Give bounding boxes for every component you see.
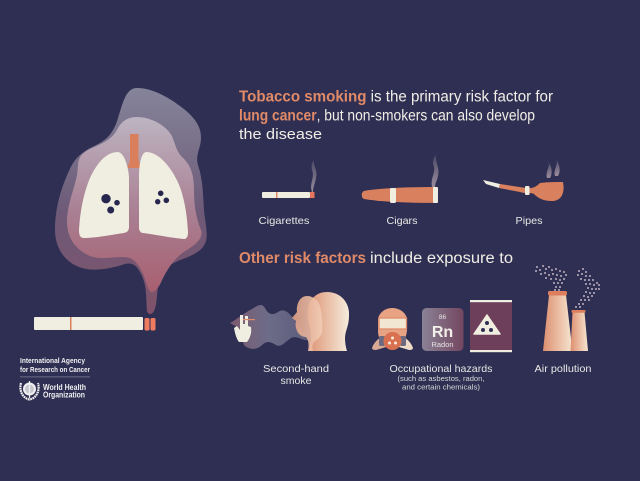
icon: cigarette xyxy=(262,160,316,198)
logo: IARC and WHO xyxy=(20,356,90,400)
WHO name: World Health xyxy=(43,382,86,392)
icon: second-hand smoke xyxy=(230,292,349,351)
label: cigars: Cigars xyxy=(386,215,418,227)
heading: tobacco smoking: Tobacco smoking is the primary risk factor for xyxy=(239,88,553,106)
heading: other risk factors: Other risk factors xyxy=(239,250,366,267)
radon tile: Radon xyxy=(431,340,454,349)
label: second-hand smoke: Second-hand xyxy=(263,363,329,375)
smoke plume xyxy=(230,305,308,349)
large cigarette xyxy=(34,317,156,330)
icon: pipe xyxy=(483,158,564,201)
IARC name: International Agency xyxy=(20,356,86,365)
label: pipes: Pipes xyxy=(516,215,542,227)
heading line 3: the disease xyxy=(239,126,322,143)
radon tile: 86 xyxy=(439,314,446,321)
icon: cigar xyxy=(362,155,438,203)
label: air pollution: Air pollution xyxy=(534,363,592,375)
label: second-hand smoke: smoke xyxy=(281,375,312,387)
inner smoke cloud xyxy=(67,117,202,292)
large chimney xyxy=(543,295,572,351)
outer smoke cloud xyxy=(55,88,207,314)
icon: air pollution chimneys xyxy=(535,265,600,351)
hazard barrel xyxy=(470,300,512,352)
icon: gas mask worker xyxy=(372,308,413,350)
illustration: lungs in smoke xyxy=(34,88,207,330)
radon tile xyxy=(422,308,464,351)
heading line 2: lung cancer, but non-smokers can also develop xyxy=(239,108,535,124)
trachea and bronchi xyxy=(128,134,141,168)
hand with cigarette xyxy=(234,315,255,342)
tumour spots xyxy=(101,190,169,214)
back head xyxy=(308,292,349,351)
right lung xyxy=(139,152,188,239)
label: hazard examples: and certain chemicals) xyxy=(402,382,481,392)
label: cigarettes: Cigarettes xyxy=(258,215,310,227)
IARC name: for Research on Cancer xyxy=(20,365,90,374)
small chimney xyxy=(570,312,588,351)
WHO emblem xyxy=(20,381,39,400)
label: occupational hazards: Occupational hazards xyxy=(390,363,492,375)
radon tile: Rn xyxy=(432,324,453,341)
front head xyxy=(292,296,322,351)
label: hazard examples: (such as asbestos, radon, xyxy=(398,374,484,383)
WHO name: Organization xyxy=(43,390,85,400)
heading: other risk factors: include exposure to xyxy=(370,250,513,267)
particles xyxy=(535,265,600,308)
heading: other risk factors xyxy=(239,250,513,267)
left lung xyxy=(79,152,129,238)
